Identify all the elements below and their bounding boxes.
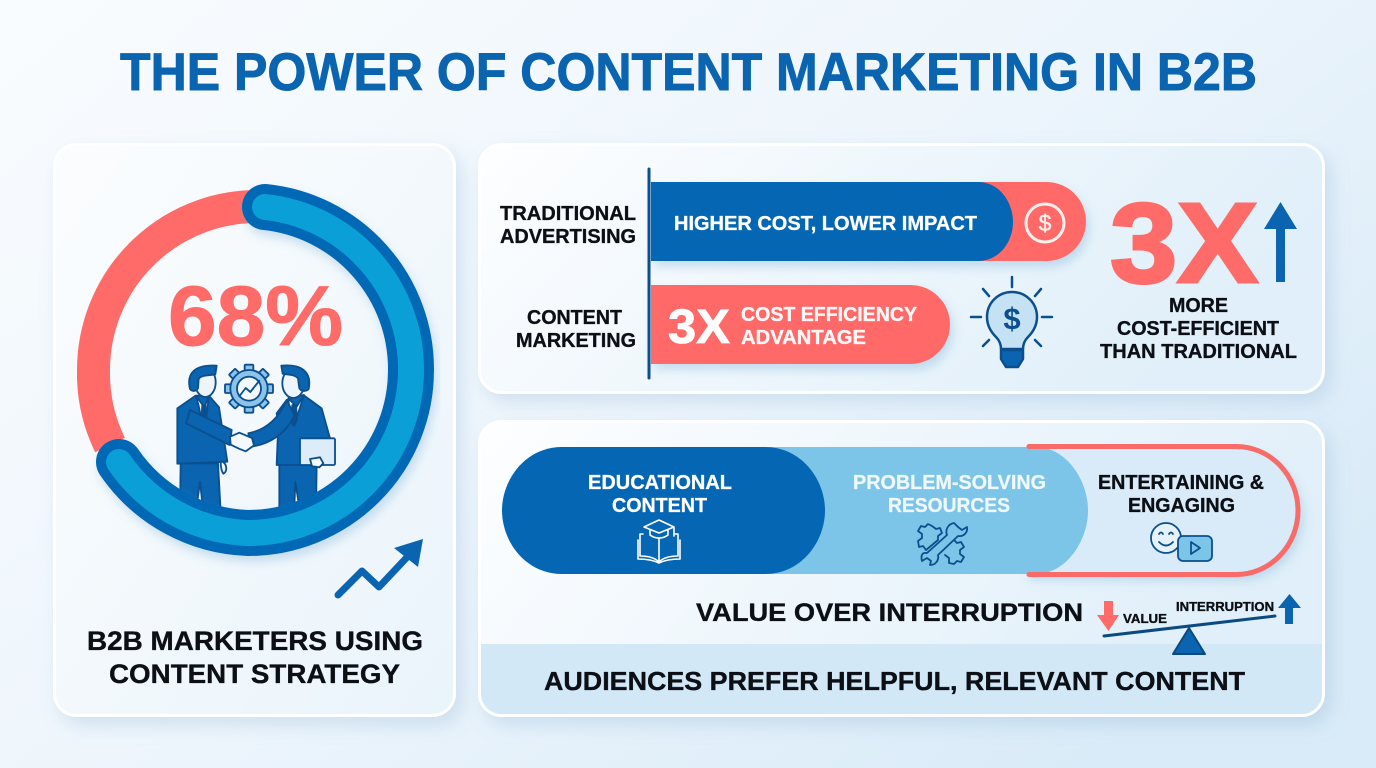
panel: cost comparison — [480, 144, 1324, 392]
caption: B2B marketers using content strategy: CONTENT STRATEGY — [109, 659, 400, 689]
donut chart: 68% — [93, 207, 411, 533]
band: audiences prefer helpful content: AUDIENCES PREFER HELPFUL, RELEVANT CONTENT — [544, 666, 1245, 696]
icon: smile and video — [1151, 523, 1212, 561]
label: content marketing — [516, 306, 636, 352]
right person — [230, 365, 335, 515]
icon: businessmen shaking hands — [177, 365, 335, 515]
segment: educational content — [502, 447, 825, 574]
title: THE POWER OF CONTENT MARKETING IN B2B — [120, 43, 1257, 102]
text: more cost-efficient than traditional — [1100, 294, 1297, 363]
icon: wrench and gear — [918, 523, 967, 565]
icon: dollar coin — [1026, 204, 1064, 242]
segment: educational content: CONTENT — [612, 495, 707, 517]
ring: remaining share — [93, 207, 265, 445]
arrow: value down — [1097, 601, 1119, 631]
segment: problem-solving resources: PROBLEM-SOLVING — [853, 472, 1046, 494]
label: traditional advertising: ADVERTISING — [500, 225, 636, 248]
label: traditional advertising: TRADITIONAL — [500, 202, 636, 225]
red outline — [1029, 446, 1298, 574]
icon: growth arrow — [338, 539, 423, 595]
text: more cost-efficient than traditional: MORE — [1169, 294, 1228, 317]
label: traditional advertising — [500, 202, 636, 248]
figure: 68%: 68% — [168, 269, 343, 363]
text: cost efficiency advantage — [741, 304, 918, 349]
icon: dollar coin: $ — [1039, 210, 1052, 236]
icon: gear with trend line — [225, 365, 273, 413]
ring: 68% share — [119, 207, 411, 533]
arrow: interruption up — [1278, 594, 1301, 624]
label: interruption: INTERRUPTION — [1176, 599, 1274, 614]
axis line — [648, 169, 650, 378]
figure: 3X: 3X — [668, 301, 730, 354]
segment: entertaining and engaging — [502, 446, 1300, 574]
label: content marketing: MARKETING — [516, 329, 636, 352]
bar: traditional advertising — [651, 182, 1086, 261]
label: value: VALUE — [1123, 611, 1167, 626]
heading: value over interruption: VALUE OVER INTERRUPTION — [696, 599, 1083, 627]
text: cost efficiency advantage: COST EFFICIENCY — [741, 304, 918, 326]
text: more cost-efficient than traditional: THAN TRADITIONAL — [1100, 340, 1297, 363]
icon: book and graduation cap — [638, 520, 680, 563]
segment: educational content: EDUCATIONAL — [588, 472, 732, 494]
text: higher cost: HIGHER COST, LOWER IMPACT — [674, 213, 977, 235]
icon: balance scale — [1097, 594, 1301, 654]
label: content marketing: CONTENT — [527, 306, 622, 329]
segment: problem-solving resources: RESOURCES — [888, 495, 1010, 517]
icon: light bulb with dollar: $ — [1003, 301, 1021, 336]
segment: entertaining and engaging: ENTERTAINING & — [1098, 472, 1264, 494]
icon: light bulb with dollar — [971, 277, 1052, 367]
bar: content marketing — [651, 285, 950, 364]
segment: problem-solving resources — [760, 447, 1088, 574]
icon: up arrow — [1264, 202, 1297, 282]
text: cost efficiency advantage: ADVANTAGE — [741, 327, 866, 349]
segment: entertaining and engaging: ENGAGING — [1128, 495, 1235, 517]
caption: B2B marketers using content strategy: B2B MARKETERS USING — [87, 626, 423, 656]
panel: 68% of B2B marketers — [54, 144, 454, 716]
figure: big 3X: 3X — [1110, 180, 1258, 306]
panel: value over interruption — [480, 422, 1324, 716]
scale beam — [1104, 616, 1275, 636]
caption: B2B marketers using content strategy — [87, 626, 423, 689]
left person — [177, 366, 232, 512]
scale pivot — [1173, 628, 1205, 654]
text: more cost-efficient than traditional: COST-EFFICIENT — [1117, 317, 1279, 340]
band: audiences prefer helpful content — [481, 644, 1322, 714]
